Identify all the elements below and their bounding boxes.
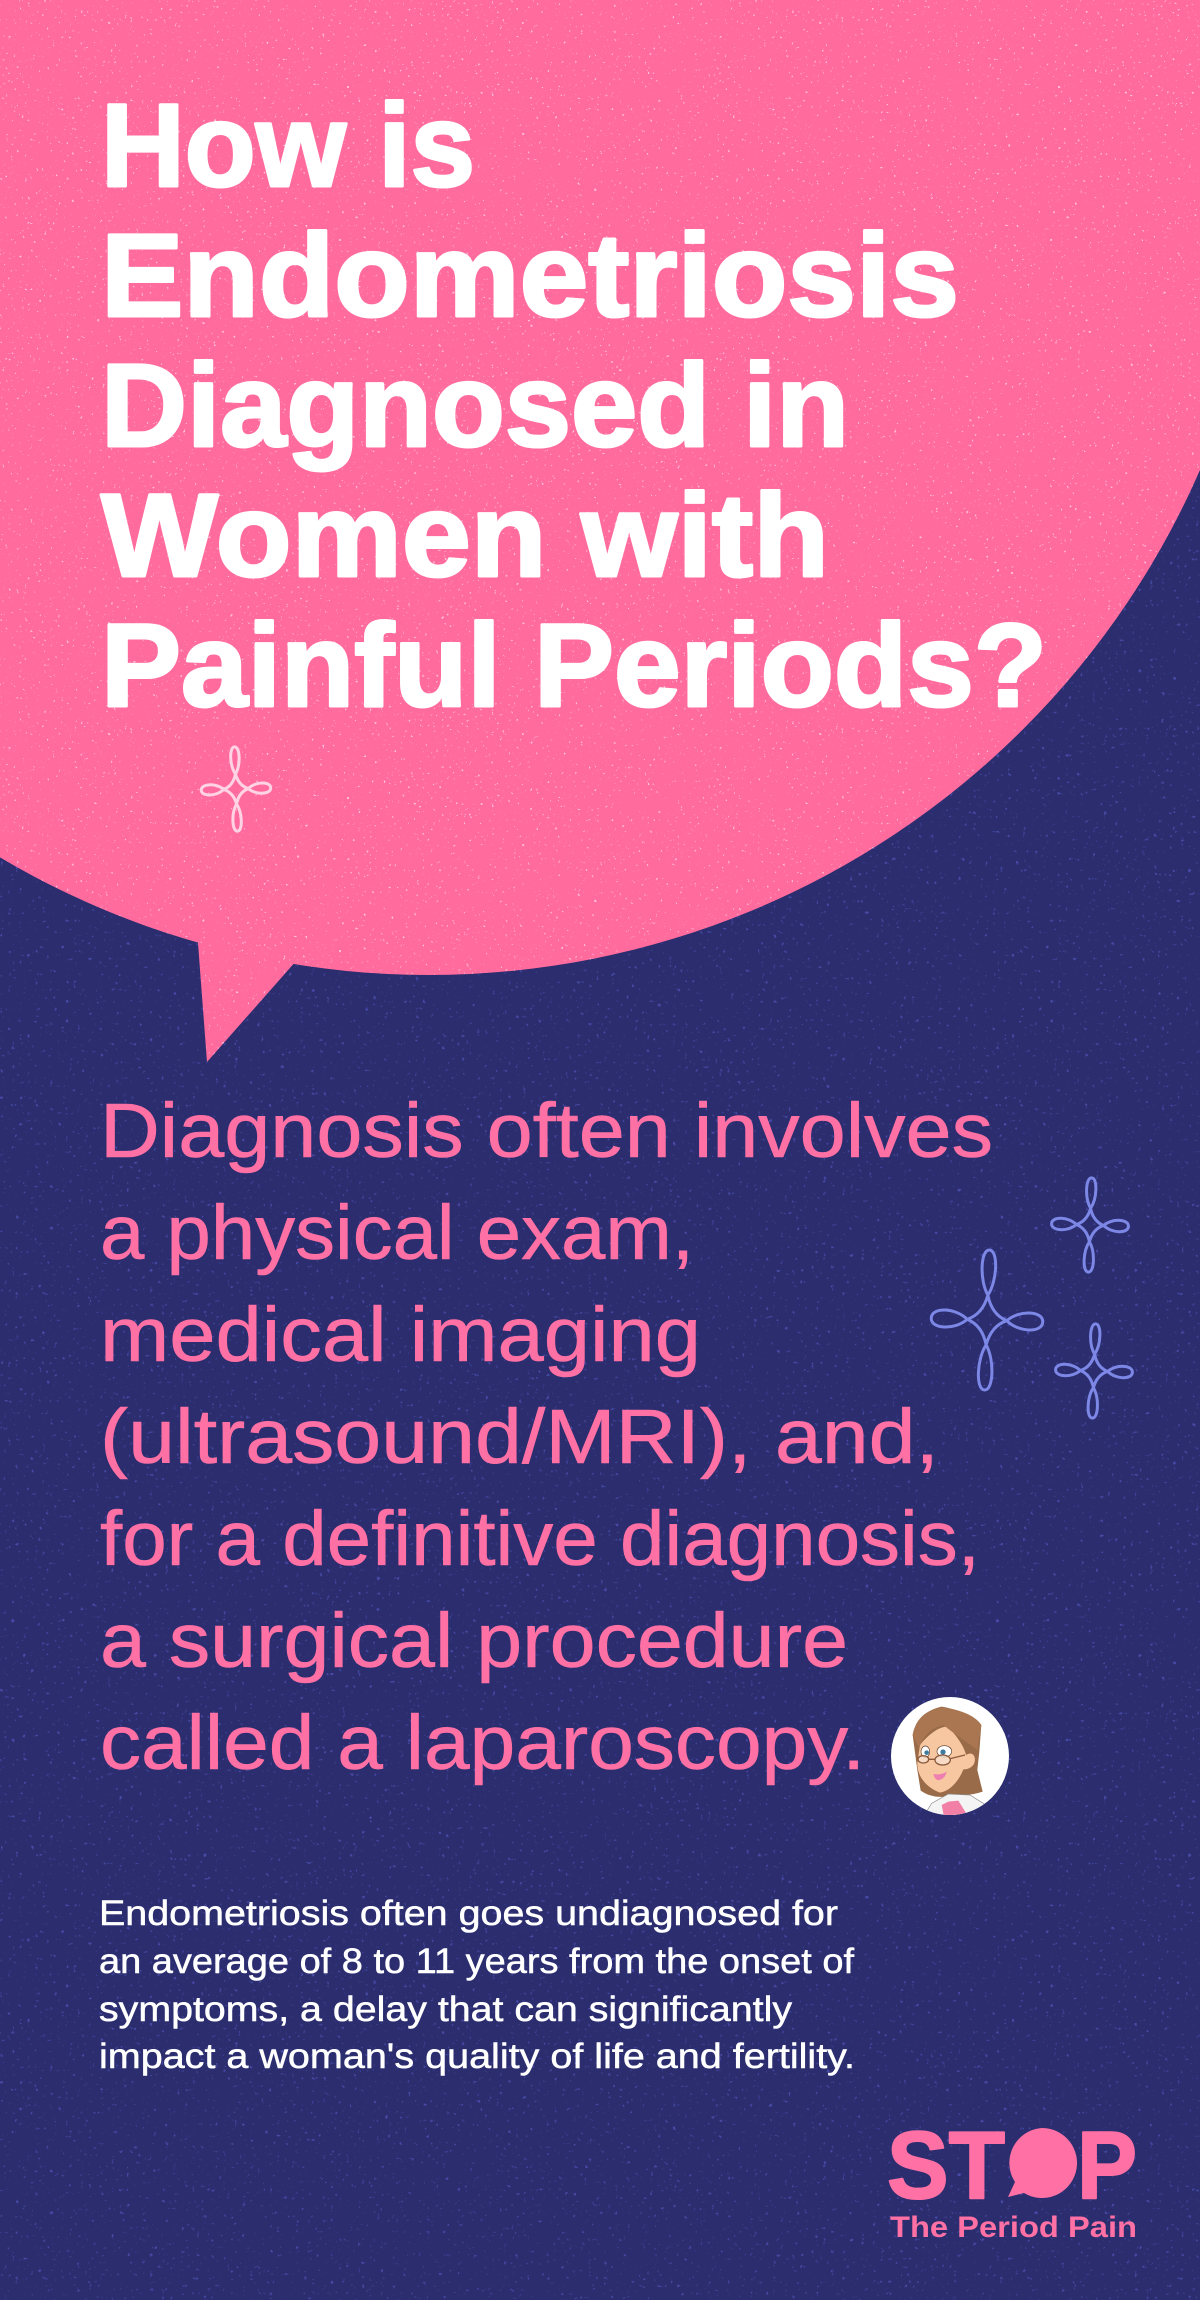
icon: white sparkle [200,746,272,832]
logo tagline: The Period Pain [890,2211,1137,2244]
coat [927,1794,984,1815]
logo: STOP The Period Pain [887,2112,1137,2244]
glasses [918,1755,965,1765]
main statement: medical imaging [100,1292,701,1378]
supporting text: Endometriosis often goes undiagnosed for [99,1894,838,1933]
main statement: a physical exam, [100,1190,694,1276]
supporting text [99,1894,855,2076]
hair fringe [913,1707,981,1750]
title [101,80,1047,732]
sparkle top right [1050,1177,1130,1273]
main statement: (ultrasound/MRI), and, [100,1394,939,1480]
main statement: called a laparoscopy. [100,1700,865,1786]
title: Diagnosed in [101,340,849,472]
title: Women with [101,470,829,602]
title: How is [101,80,475,212]
main statement [100,1088,993,1786]
main statement: a surgical procedure [100,1598,848,1684]
logo letters: ST [887,2112,1005,2219]
sparkle bottom right [1054,1323,1134,1419]
title: Painful Periods? [101,600,1047,732]
main statement: Diagnosis often involves [100,1088,993,1174]
eyes [921,1746,930,1757]
hair back [913,1707,983,1797]
shirt [942,1800,966,1815]
face [917,1727,975,1793]
supporting text: impact a woman's quality of life and fertility. [99,2037,855,2076]
icon: doctor avatar [891,1697,1009,1817]
mouth [933,1771,947,1780]
supporting text: symptoms, a delay that can significantly [99,1990,793,2029]
sparkle large [929,1248,1045,1392]
icon: blue sparkles [929,1177,1134,1419]
logo speech bubble O [1008,2128,1077,2198]
logo: STOP The Period Pain: P [1077,2112,1137,2219]
title: Endometriosis [101,210,959,342]
main statement: for a definitive diagnosis, [100,1496,980,1582]
speech bubble [0,0,1200,1070]
supporting text: an average of 8 to 11 years from the onset of [99,1942,854,1981]
